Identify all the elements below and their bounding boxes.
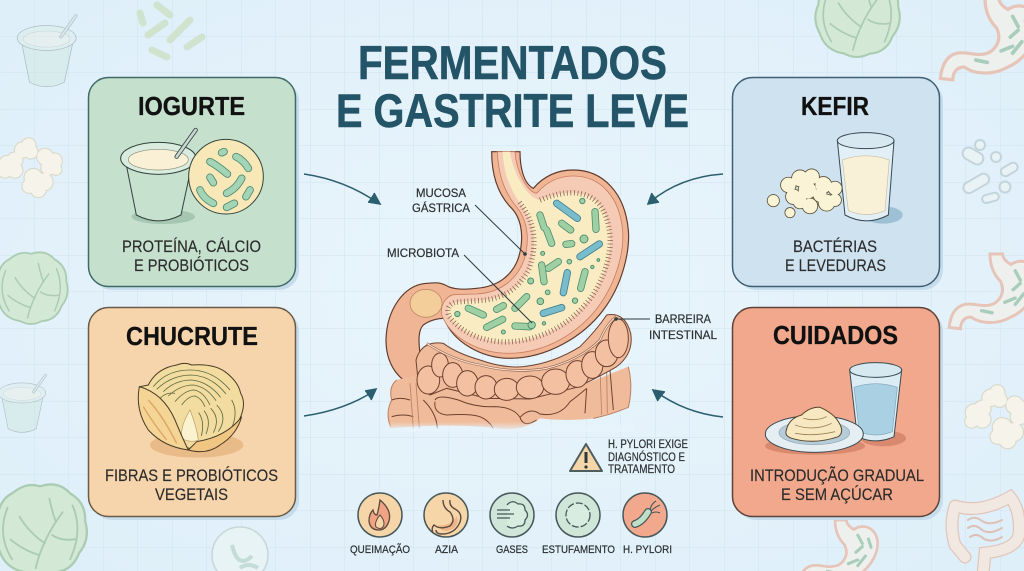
pyloric sphincter [410, 289, 442, 317]
icon: faded bacteria top [140, 5, 202, 57]
symptom: queimação: QUEIMAÇÃO [350, 543, 410, 556]
text: kefir: BACTÉRIAS [793, 237, 877, 256]
label: mucosa gástrica: MUCOSA [416, 186, 466, 200]
text: chucrute [105, 466, 278, 504]
label: microbiota [387, 246, 532, 323]
text: kefir: E LEVEDURAS [785, 256, 886, 275]
icon: faded stomach bottom [798, 520, 878, 571]
icon: warning triangle [570, 444, 602, 471]
title [336, 36, 689, 137]
stomach lumen [448, 152, 610, 342]
icon: faded bacteria circle [212, 527, 268, 571]
text: cuidados [750, 466, 924, 504]
icon: faded cabbage top right [815, 0, 900, 57]
symptom: azia [424, 493, 468, 556]
symptom: h. pylori: H. PYLORI [623, 544, 672, 556]
heading: cuidados: CUIDADOS [773, 320, 898, 350]
text: iogurte: PROTEÍNA, CÁLCIO [122, 237, 261, 256]
panel: kefir [732, 78, 943, 290]
text: kefir [785, 237, 886, 275]
icon: faded bacteria right [960, 140, 1019, 204]
warning callout [570, 439, 688, 476]
label: barreira intestinal: INTESTINAL [649, 328, 717, 342]
heading: iogurte: IOGURTE [138, 91, 245, 121]
title: E GASTRITE LEVE [336, 84, 689, 137]
text: chucrute: VEGETAIS [155, 485, 228, 504]
large intestine [416, 315, 631, 400]
arrow: chucrute to stomach [304, 389, 376, 416]
icon: yogurt cup and bacteria [121, 130, 263, 224]
warning callout: TRATAMENTO [608, 464, 675, 476]
arrow: cuidados to stomach [653, 390, 723, 417]
label: microbiota: MICROBIOTA [387, 246, 459, 260]
symptom: azia: AZIA [435, 544, 459, 556]
panel: chucrute [88, 308, 299, 520]
icon: faded cabbage bottom left [0, 484, 87, 571]
duodenum and stomach wall [386, 152, 629, 387]
bacteria [455, 198, 600, 334]
label: barreira intestinal: BARREIRA [655, 312, 711, 326]
icon: faded intestine bottom right [952, 497, 1019, 571]
warning callout: DIAGNÓSTICO E [608, 451, 685, 464]
arrow: iogurte to stomach [304, 174, 380, 204]
icon: water glass and food plate [765, 363, 906, 455]
heading: chucrute: CHUCRUTE [126, 321, 258, 351]
panel: iogurte [88, 78, 299, 290]
symptom: gases [490, 493, 534, 556]
gastric villi [448, 193, 610, 342]
small intestine [385, 367, 635, 432]
title: FERMENTADOS [358, 36, 667, 89]
symptom: gases: GASES [496, 544, 528, 556]
mucosa layer [441, 152, 623, 353]
icon: cabbage [138, 363, 244, 458]
text: cuidados: E SEM AÇÚCAR [781, 485, 893, 504]
heading: kefir: KEFIR [801, 91, 869, 121]
symptom: estufamento: ESTUFAMENTO [542, 544, 615, 556]
label: mucosa gástrica [412, 186, 527, 256]
label: barreira intestinal [614, 312, 717, 342]
icon: faded grains left [0, 139, 61, 197]
icon: faded grains lower right [966, 386, 1024, 448]
text: chucrute: FIBRAS E PROBIÓTICOS [105, 466, 278, 485]
panel: cuidados [732, 308, 943, 520]
icon: kefir glass and grains [768, 133, 903, 224]
icon: faded cabbage left [0, 252, 68, 324]
text: iogurte [122, 237, 261, 275]
text: iogurte: E PROBIÓTICOS [134, 256, 249, 275]
symptom: queimação [350, 493, 410, 556]
icon: faded stomach right [949, 254, 1024, 329]
digestive system diagram [385, 152, 635, 432]
arrow: kefir to stomach [648, 174, 723, 204]
icon: faded stomach top right [940, 0, 1024, 80]
warning callout: H. PYLORI EXIGE [608, 439, 688, 451]
icon: faded yogurt lower left [0, 375, 46, 432]
icon: faded yogurt top left [17, 16, 76, 87]
symptom: estufamento [542, 493, 615, 556]
label: mucosa gástrica: GÁSTRICA [412, 200, 470, 215]
symptom: h. pylori [623, 493, 672, 556]
text: cuidados: INTRODUÇÃO GRADUAL [750, 466, 924, 485]
